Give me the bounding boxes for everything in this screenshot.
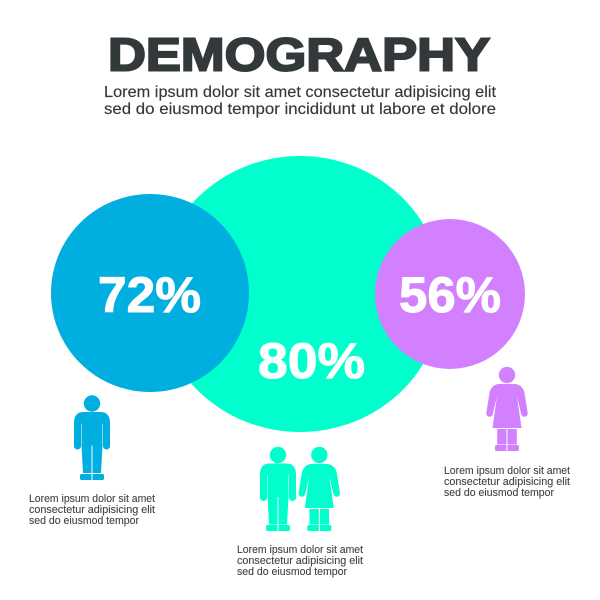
text block: left bbox=[29, 493, 155, 527]
circle: blue 72%: 72% bbox=[98, 267, 201, 323]
text block: left: sed do eiusmod tempor bbox=[29, 515, 139, 527]
text block: right: Lorem ipsum dolor sit amet bbox=[444, 465, 570, 477]
text block: right bbox=[444, 465, 570, 499]
icon: man green bbox=[260, 447, 296, 533]
text block: center: Lorem ipsum dolor sit amet bbox=[237, 544, 363, 556]
title: DEMOGRAPHY bbox=[108, 28, 490, 80]
text block: center: sed do eiusmod tempor bbox=[237, 566, 347, 578]
text block: right: consectetur adipisicing elit bbox=[444, 476, 570, 488]
text block: left: Lorem ipsum dolor sit amet bbox=[29, 493, 155, 505]
text block: right: sed do eiusmod tempor bbox=[444, 487, 554, 499]
icon: woman purple bbox=[486, 367, 528, 452]
circle: purple 56%: 56% bbox=[399, 267, 501, 323]
circle: blue 72% bbox=[51, 194, 249, 392]
circle: green 80%: 80% bbox=[258, 333, 365, 389]
circle: green 80% bbox=[157, 156, 443, 432]
text block: center bbox=[237, 544, 363, 578]
circle: purple 56% bbox=[375, 219, 525, 369]
text block: center: consectetur adipisicing elit bbox=[237, 555, 363, 567]
text block: left: consectetur adipisicing elit bbox=[29, 504, 155, 516]
subtitle bbox=[104, 84, 497, 118]
icon: woman green bbox=[299, 447, 340, 532]
subtitle: Lorem ipsum dolor sit amet consectetur adipisicing elit bbox=[104, 84, 497, 101]
icon: man blue bbox=[74, 395, 110, 482]
subtitle: sed do eiusmod tempor incididunt ut labore et dolore bbox=[104, 101, 496, 118]
